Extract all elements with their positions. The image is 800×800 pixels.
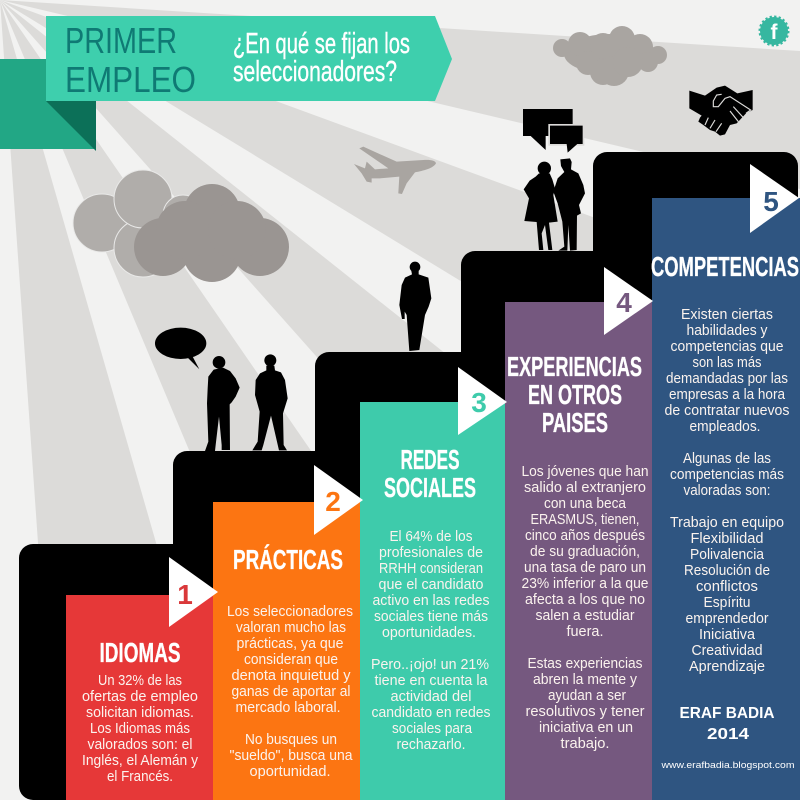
text: competencias: Polivalencia: [690, 547, 765, 563]
heading: experiencias: EN OTROS: [528, 379, 622, 410]
text: idiomas: Un 32% de las: [98, 673, 182, 689]
silhouette: couple: [524, 158, 585, 251]
text: experiencias: resolutivos y tener: [526, 704, 645, 720]
text: experiencias: salido al extranjero: [524, 480, 646, 496]
text: experiencias: 23% inferior a la que: [522, 576, 648, 592]
silhouette: walking man: [399, 262, 431, 351]
text: redes sociales: activo en las redes: [372, 593, 490, 609]
text: idiomas: ofertas de empleo: [82, 689, 198, 705]
text: practicas: mercado laboral.: [236, 700, 340, 716]
step marker 5: 5: [763, 186, 779, 217]
text: competencias: Espíritu: [704, 595, 750, 611]
panel: redes sociales: [360, 402, 505, 800]
stairs: black steps: [19, 152, 798, 800]
text: redes sociales: candidato en redes: [372, 705, 490, 721]
text: experiencias: iniciativa en un: [539, 720, 633, 736]
text: practicas: valoran mucho las: [236, 620, 346, 636]
text: practicas: prácticas, ya que: [236, 636, 344, 652]
text: competencias: Iniciativa: [699, 627, 756, 643]
text: redes sociales: rechazarlo.: [396, 737, 466, 753]
text: competencias: empresas a la hora: [669, 387, 786, 403]
icon: upper cloud: [553, 26, 667, 86]
text: experiencias: trabajo.: [560, 736, 610, 752]
icon: facebook badge: f: [770, 21, 778, 44]
heading: experiencias: PAISES: [542, 407, 608, 438]
icon: airplane: [354, 147, 436, 194]
text: redes sociales: sociales para: [392, 721, 473, 737]
text: competencias: Aprendizaje: [689, 659, 765, 675]
step marker 2: 2: [325, 486, 341, 517]
text: practicas: Los seleccionadores: [227, 604, 353, 620]
text: experiencias: una tasa de paro un: [524, 560, 646, 576]
text: competencias: competencias que: [670, 339, 784, 355]
silhouette: standing man: [252, 354, 288, 450]
heading: experiencias: [507, 351, 642, 438]
text: practicas: oportunidad.: [250, 764, 330, 780]
text: experiencias: cinco años después: [525, 528, 645, 544]
heading: redes sociales: SOCIALES: [384, 472, 476, 503]
title: [65, 20, 196, 100]
text: competencias: valoradas son:: [684, 483, 770, 499]
text: competencias: habilidades y: [686, 323, 768, 339]
text: redes sociales: tiene en cuenta la: [374, 673, 488, 689]
step marker 5: [750, 164, 799, 233]
heading: idiomas: IDIOMAS: [100, 637, 180, 668]
text: competencias: son las más: [692, 355, 762, 371]
text: idiomas: valorados son: el: [88, 737, 192, 753]
text: redes sociales: RRHH consideran: [379, 561, 483, 577]
panel: experiencias: [505, 302, 652, 800]
icon: back cloud: [73, 170, 289, 282]
subtitle: seleccionadores?: [233, 56, 397, 88]
text: competencias: Creatividad: [692, 643, 762, 659]
text: idiomas: el Francés.: [107, 769, 173, 785]
text: competencias: Existen ciertas: [681, 307, 773, 323]
step marker 3: 3: [471, 387, 487, 418]
text: experiencias: abren la mente y: [533, 672, 638, 688]
text: competencias: Algunas de las: [683, 451, 771, 467]
text: experiencias: Estas experiencias: [528, 656, 642, 672]
text: idiomas: Los Idiomas más: [90, 721, 190, 737]
text: competencias: competencias más: [670, 467, 784, 483]
text: practicas: No busques un: [245, 732, 337, 748]
text: idiomas: Inglés, el Alemán y: [82, 753, 199, 769]
text: practicas: denota inquietud y: [232, 668, 351, 684]
website url: www.erafbadia.blogspot.com: [660, 760, 795, 771]
subtitle: [233, 28, 410, 88]
heading: practicas: PRÁCTICAS: [233, 544, 343, 575]
text: practicas: "sueldo", busca una: [230, 748, 353, 764]
text: competencias: de contratar nuevos: [664, 403, 790, 419]
text: competencias: emprendedor: [686, 611, 769, 627]
text: experiencias: Los jóvenes que han: [522, 464, 648, 480]
text: redes sociales: actividad del: [390, 689, 472, 705]
silhouette: man with hand on hip: [205, 356, 240, 451]
speech bubble: two people: [155, 328, 206, 369]
text: competencias: conflictos: [696, 579, 758, 595]
text: competencias: empleados.: [690, 419, 760, 435]
text: competencias: Resolución de: [684, 563, 770, 579]
text: competencias: Trabajo en equipo: [670, 515, 784, 531]
ribbon fold: [0, 59, 96, 151]
text: redes sociales: profesionales de: [379, 545, 483, 561]
text: experiencias: salen a estudiar: [536, 608, 635, 624]
text: experiencias: con una beca: [544, 496, 627, 512]
author credit: [680, 705, 775, 743]
text: idiomas: solicitan idiomas.: [86, 705, 194, 721]
text: experiencias: ERASMUS, tienen,: [530, 512, 640, 528]
title: EMPLEO: [65, 59, 196, 100]
text: idiomas: [82, 673, 199, 785]
subtitle: ¿En qué se fijan los: [233, 28, 410, 60]
text: redes sociales: El 64% de los: [390, 529, 472, 545]
icon: handshake: [689, 86, 753, 136]
step marker 4: [604, 267, 653, 335]
text: experiencias: fuera.: [566, 624, 604, 640]
text: experiencias: ayudan a ser: [548, 688, 626, 704]
title: PRIMER: [65, 20, 177, 61]
text: competencias: demandadas por las: [666, 371, 788, 387]
text: redes sociales: que el candidato: [378, 577, 484, 593]
step marker 4: 4: [616, 287, 632, 318]
heading: redes sociales: [384, 444, 476, 503]
step marker 2: [314, 465, 363, 535]
text: redes sociales: [371, 529, 490, 753]
text: redes sociales: oportunidades.: [382, 625, 476, 641]
text: practicas: ganas de aportar al: [232, 684, 350, 700]
text: competencias: [664, 307, 790, 675]
speech bubbles: couple: [523, 109, 584, 153]
text: practicas: consideran que: [244, 652, 338, 668]
heading: experiencias: EXPERIENCIAS: [507, 351, 642, 382]
text: experiencias: afecta a los que no: [525, 592, 645, 608]
step marker 1: 1: [177, 579, 193, 610]
title banner: [46, 16, 452, 101]
heading: redes sociales: REDES: [400, 444, 460, 475]
panel: practicas: [213, 502, 360, 800]
panel: competencias: [651, 198, 800, 800]
step marker 1: [169, 557, 218, 627]
author credit: 2014: [707, 726, 749, 743]
text: competencias: Flexibilidad: [690, 531, 764, 547]
panel: idiomas: [66, 595, 213, 800]
author credit: ERAF BADIA: [680, 705, 775, 722]
text: practicas: [227, 604, 353, 780]
text: experiencias: de su graduación,: [530, 544, 640, 560]
text: redes sociales: sociales tiene más: [374, 609, 488, 625]
text: experiencias: [522, 464, 648, 752]
icon: facebook badge: [760, 17, 788, 45]
text: redes sociales: Pero..¡ojo! un 21%: [371, 657, 489, 673]
step marker 3: [458, 367, 507, 435]
